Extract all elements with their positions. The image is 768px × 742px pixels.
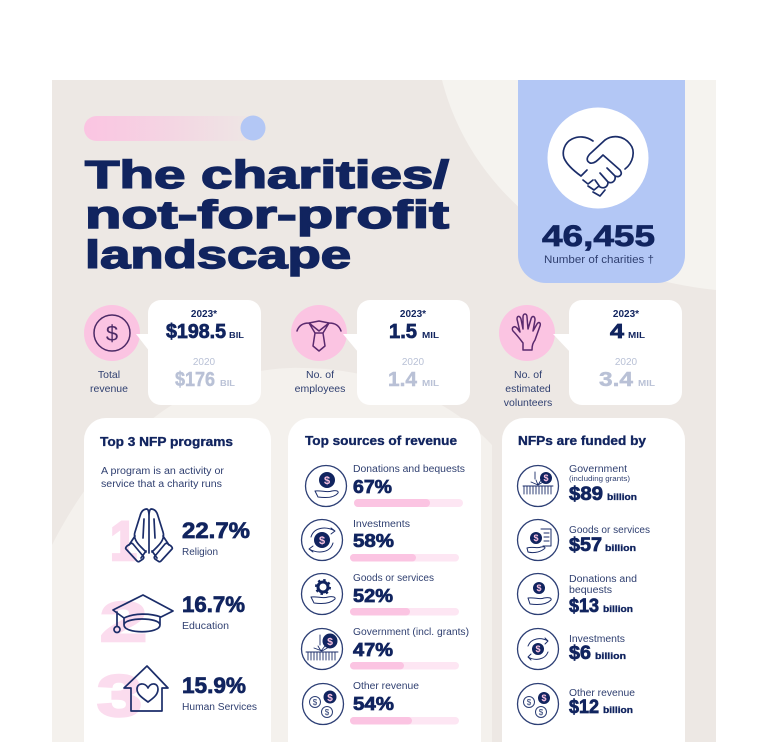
row: government funding: $89	[569, 484, 603, 505]
panel: top 3 NFP programs	[84, 418, 271, 742]
row: donations funding: $	[536, 583, 542, 593]
stat: volunteers: MIL	[628, 330, 645, 340]
row: other revenue: $	[325, 708, 330, 717]
stat: employees: 1.4	[388, 369, 418, 391]
stat: volunteers: volunteers	[504, 397, 552, 409]
row: other revenue: Other revenue	[353, 681, 419, 692]
row: other revenue funding: $12	[569, 697, 599, 718]
row: donations funding: bequests	[569, 585, 612, 596]
icon: tie	[297, 321, 341, 351]
decorative pill	[84, 116, 266, 141]
row: other revenue funding: billion	[603, 705, 633, 716]
rank numbers: 3	[97, 664, 142, 729]
rank numbers	[97, 509, 147, 729]
row: government funding: billion	[607, 492, 637, 503]
row: investments: $	[319, 535, 325, 547]
stat: human services: Human Services	[182, 702, 257, 713]
panel: NFPs are funded by	[502, 418, 685, 742]
stat: volunteers: No. of	[514, 369, 542, 381]
row: investments funding: billion	[595, 651, 626, 662]
label: number of charities: Number of charities †	[544, 254, 654, 266]
rank numbers: 2	[100, 590, 147, 653]
row: other revenue funding: Other revenue	[569, 688, 635, 699]
row: investments funding: $	[535, 644, 541, 654]
row: donations funding	[518, 574, 637, 617]
row: goods or services funding: $	[533, 533, 539, 543]
row: donations funding: Donations and	[569, 574, 637, 585]
panel: top sources of revenue: Top sources of revenue	[305, 433, 457, 448]
background panel	[52, 80, 716, 742]
stat: religion	[182, 518, 250, 558]
row: other revenue	[302, 681, 459, 724]
stat: total revenue: BIL	[220, 378, 235, 388]
stat: education	[182, 592, 245, 632]
stat: total revenue: $198.5	[166, 321, 226, 343]
row: other revenue funding: $	[527, 698, 532, 707]
stat: employees: No. of	[306, 369, 334, 381]
stat: volunteers: 2020	[615, 357, 638, 368]
row: other revenue: $	[327, 693, 333, 704]
row: goods or services: 52%	[353, 586, 393, 606]
panel: top sources of revenue	[288, 418, 481, 742]
icon: heart handshake	[548, 108, 648, 208]
row: government funding: $	[543, 473, 549, 483]
panel: top 3 NFP programs: A program is an activity or	[101, 466, 225, 477]
row: donations funding: billion	[603, 604, 633, 615]
row: other revenue: $	[313, 698, 318, 707]
icon: graduation cap	[113, 595, 173, 632]
row: donations and bequests: Donations and bequests	[353, 464, 465, 475]
stat: religion: Religion	[182, 547, 218, 558]
title: The charities/	[85, 154, 449, 197]
row: investments funding	[518, 628, 626, 670]
row: government funding: (including grants)	[569, 476, 630, 483]
stat: human services	[182, 673, 257, 713]
stat: volunteers: MIL	[638, 378, 655, 388]
stat: employees: 2020	[402, 357, 425, 368]
icon: house with heart	[124, 666, 168, 711]
stat: employees: employees	[295, 383, 345, 395]
stat: volunteers	[499, 300, 682, 409]
row: investments funding: Investments	[569, 634, 625, 645]
stat: total revenue	[84, 300, 261, 405]
icon: dollar coin: $	[106, 321, 118, 346]
panel: top 3 NFP programs: Top 3 NFP programs	[100, 434, 233, 449]
row: investments	[302, 519, 459, 562]
row: government: $	[327, 636, 333, 648]
stat: employees: 1.5	[389, 321, 417, 343]
row: other revenue: 54%	[353, 694, 394, 714]
row: goods or services: Goods or services	[353, 573, 434, 584]
stat: volunteers: 2023*	[613, 309, 639, 320]
row: government funding: Government	[569, 464, 627, 475]
stat: total revenue: 2020	[193, 357, 216, 368]
stat: religion: 22.7%	[182, 518, 250, 543]
row: other revenue funding: $	[539, 708, 544, 717]
icon: dollar coin	[94, 315, 130, 351]
stat: total revenue: BIL	[229, 330, 244, 340]
stat: volunteers: estimated	[505, 383, 551, 395]
row: government funding	[518, 464, 637, 506]
stat: employees: MIL	[422, 378, 439, 388]
stat: employees: MIL	[422, 330, 439, 340]
row: investments: Investments	[353, 519, 410, 530]
row: investments funding: $6	[569, 643, 591, 664]
stat: employees	[291, 300, 470, 405]
icon: hand	[512, 314, 540, 350]
panel: top 3 NFP programs: service that a charity runs	[101, 479, 222, 490]
stat: human services: 15.9%	[182, 673, 246, 698]
stat: education: Education	[182, 621, 229, 632]
icon: praying hands	[126, 509, 172, 562]
title: not-for-profit	[85, 194, 449, 237]
stat: total revenue: Total	[98, 369, 120, 381]
row: other revenue funding: $	[541, 693, 547, 703]
row: goods or services funding: Goods or services	[569, 525, 650, 536]
panel: NFPs are funded by: NFPs are funded by	[518, 433, 647, 448]
rank numbers: 1	[110, 509, 137, 572]
row: donations and bequests: 67%	[353, 477, 392, 497]
row: government: 47%	[353, 640, 393, 660]
icon: cap tassel	[114, 626, 120, 632]
stat: total revenue: 2023*	[191, 309, 217, 320]
row: donations and bequests: $	[324, 475, 330, 487]
row: other revenue funding	[518, 684, 635, 724]
row: donations funding: $13	[569, 596, 599, 617]
row: donations and bequests	[306, 464, 465, 507]
stat: volunteers: 4	[610, 321, 625, 343]
row: goods or services funding: $57	[569, 535, 602, 556]
panel: number of charities	[518, 80, 685, 283]
title: landscape	[85, 234, 351, 277]
stat: volunteers: 3.4	[599, 369, 634, 391]
stat: total revenue: revenue	[90, 383, 128, 395]
statistic: 46,455: 46,455	[542, 220, 655, 253]
stat: education: 16.7%	[182, 592, 245, 617]
stat: total revenue: $176	[175, 369, 215, 391]
row: government: Government (incl. grants)	[353, 627, 469, 638]
row: goods or services	[302, 573, 459, 616]
row: goods or services funding	[518, 520, 650, 560]
row: goods or services funding: billion	[605, 543, 636, 554]
row: government	[302, 627, 469, 670]
row: investments: 58%	[353, 531, 394, 551]
stat: employees: 2023*	[400, 309, 426, 320]
title	[85, 154, 449, 277]
